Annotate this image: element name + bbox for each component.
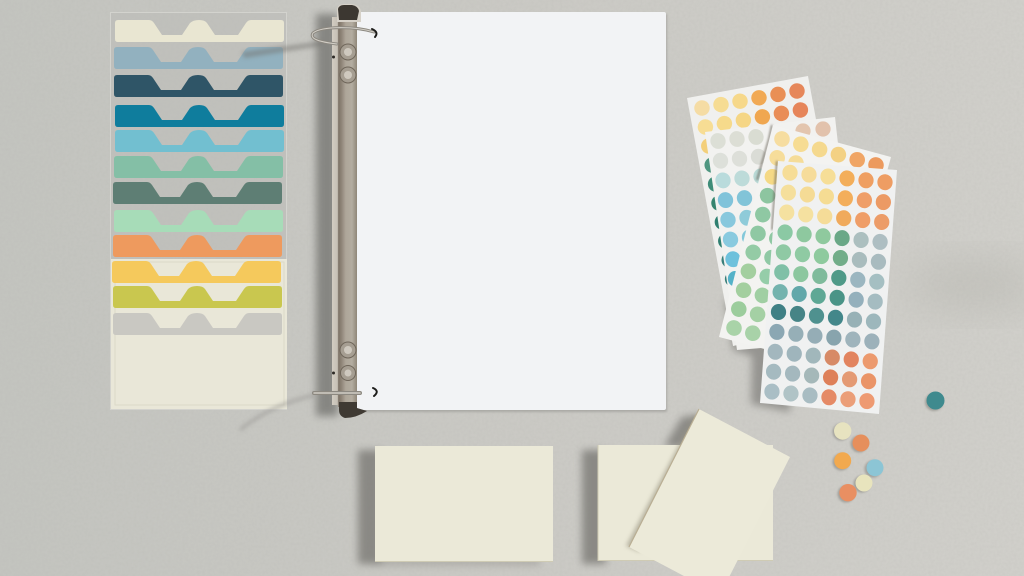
note card right: [598, 445, 773, 560]
tab: sky blue: [115, 130, 284, 152]
card shadows: [358, 415, 702, 565]
panel: loose dot stickers: [832, 392, 944, 502]
tab: orange: [113, 235, 282, 257]
tab: dark slate: [114, 75, 283, 97]
dot: amber: [834, 452, 851, 469]
sheet shadow streak, top: [242, 41, 322, 58]
tab: chartreuse: [113, 286, 282, 308]
white page: [357, 12, 667, 412]
dot: coral: [839, 484, 857, 501]
binder shadow: [316, 14, 338, 416]
tab: deep teal: [115, 105, 284, 127]
tab: grey green: [113, 182, 282, 204]
sticker sheet B: [705, 117, 860, 350]
rivets, bottom: [332, 342, 356, 380]
metal rail: [332, 17, 357, 407]
tab: mint: [114, 210, 283, 232]
bottom ring: [314, 388, 377, 396]
panel: index tab sheet: [110, 12, 287, 410]
dot: teal: [926, 392, 944, 410]
tab: dusty blue: [114, 47, 283, 69]
dot: pale yellow: [856, 474, 872, 492]
cream pocket: [111, 259, 287, 409]
tab: cream: [115, 20, 284, 42]
note card left: [375, 446, 553, 562]
sheet shadow streak, bottom: [240, 395, 315, 430]
bottom clamp: [339, 402, 367, 418]
rotated card shadow: [626, 414, 702, 552]
rotated note card: [629, 409, 790, 576]
tab: yellow: [112, 261, 281, 283]
panel: sticker sheets: [687, 76, 897, 414]
dot: orange: [852, 434, 870, 452]
top clamp: [337, 4, 361, 22]
rivets, top: [332, 44, 356, 83]
clear plastic sheet: [110, 12, 286, 410]
dot: blue: [866, 459, 884, 476]
tab: sea green: [114, 156, 283, 178]
dot: cream: [834, 422, 851, 440]
tab: light grey: [113, 313, 282, 335]
sticker sheet A: [687, 76, 853, 346]
panel: binder: [312, 4, 667, 418]
sheet shadow: [725, 300, 790, 412]
dot shadows: [832, 393, 943, 502]
top ring: [312, 28, 376, 44]
sticker sheet C: [719, 125, 891, 367]
panel: note cards: [358, 409, 790, 576]
sticker sheet D: [760, 161, 897, 414]
